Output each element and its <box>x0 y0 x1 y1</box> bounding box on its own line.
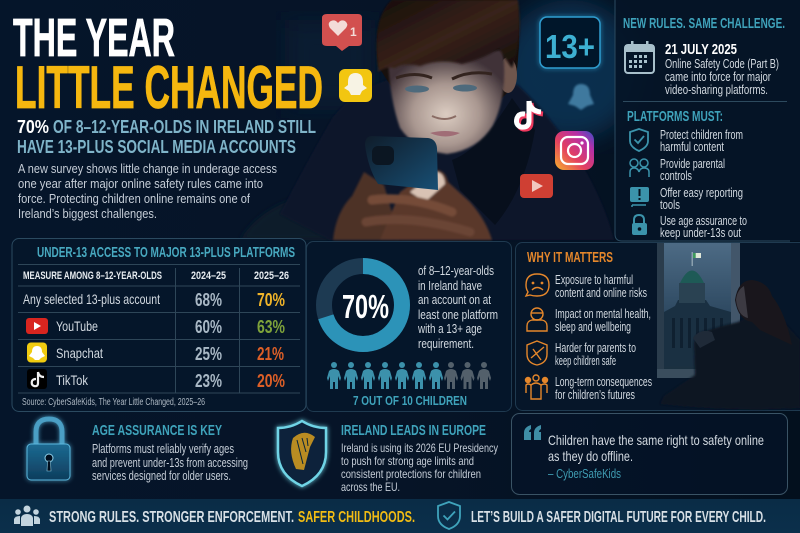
item: long-term: Long-term consequences <box>555 375 652 389</box>
icon: shield check <box>630 129 648 151</box>
icon: like notification: 1 <box>350 25 357 39</box>
item: protect children <box>660 128 743 154</box>
text block: Ireland leads: to push for strong age limits and <box>341 454 474 468</box>
face <box>388 50 504 154</box>
row: youtube: 63% <box>257 317 285 337</box>
icon: broken shield <box>527 341 547 365</box>
panel: access table <box>12 238 306 412</box>
item: mental health: sleep and wellbeing <box>555 320 631 334</box>
quote text: as they do offline. <box>548 448 633 464</box>
icon: parents <box>630 159 649 177</box>
building <box>664 252 731 366</box>
text block: Ireland leads: Ireland is using its 2026 EU Presidency <box>341 441 498 455</box>
item: age assurance: Use age assurance to <box>660 214 747 228</box>
text block: Ireland leads: across the EU. <box>341 480 400 494</box>
item: long-term: for children’s futures <box>555 388 635 402</box>
item: parents <box>555 341 636 368</box>
illustration: digital padlock <box>27 419 70 480</box>
quote mark <box>524 425 541 440</box>
text block: age assurance: services designed for older users. <box>92 469 231 483</box>
row: snapchat: 21% <box>257 344 284 364</box>
statistic description: in Ireland have <box>418 278 482 293</box>
row: snapchat: Snapchat <box>56 345 103 361</box>
quote attribution: – CyberSafeKids <box>548 467 621 481</box>
pictogram caption: 7 OUT OF 10 CHILDREN <box>353 393 467 408</box>
text block: age assurance: AGE ASSURANCE IS KEY <box>92 422 222 439</box>
table source: Source: CyberSafeKids, The Year Little Changed, 2025–26 <box>22 397 205 408</box>
icon: people <box>14 506 40 526</box>
text block: age assurance <box>92 422 248 483</box>
statistic description: with a 13+ age <box>417 321 482 336</box>
row: any account: 68% <box>195 290 222 310</box>
pictogram: 7 of 10 children <box>327 362 491 389</box>
footer banner <box>0 499 800 533</box>
row: any account: Any selected 13-plus account <box>23 291 160 307</box>
icon: report <box>630 187 649 207</box>
rule description: video-sharing platforms. <box>665 83 768 97</box>
girl silhouette <box>660 280 800 409</box>
icon: instagram <box>555 131 594 170</box>
panel: quote <box>512 414 788 494</box>
row: tiktok: 20% <box>257 371 285 391</box>
text block: Ireland leads <box>341 422 498 494</box>
panel: 70 percent statistic <box>306 242 512 412</box>
rule description: came into force for major <box>665 70 771 84</box>
hoodie <box>280 80 614 240</box>
row: snapchat: 25% <box>195 344 222 364</box>
item: parental controls: Provide parental <box>660 157 725 171</box>
icon: snapchat <box>339 69 372 102</box>
item: reporting tools: Offer easy reporting <box>660 186 743 200</box>
illustration: Irish harp shield <box>278 421 326 486</box>
item: protect children: harmful content <box>660 140 724 154</box>
eyes and brows <box>396 73 492 136</box>
statistic description <box>417 263 498 351</box>
table header: 2025–26 <box>254 270 289 282</box>
icon: tiktok <box>516 101 543 129</box>
title <box>13 8 323 121</box>
item: age assurance: keep under-13s out <box>660 226 741 240</box>
row: tiktok: 23% <box>195 371 222 391</box>
hands <box>333 170 492 240</box>
text block: Ireland leads: consistent protections for children <box>341 467 481 481</box>
item: reporting tools: tools <box>660 198 680 212</box>
row: snapchat <box>27 342 284 364</box>
intro text: Ireland’s biggest challenges. <box>18 206 157 221</box>
panel: new rules <box>615 0 800 241</box>
icon: ghost <box>568 84 594 110</box>
item: exposure: content and online risks <box>555 286 647 300</box>
illustration: girl at window <box>657 243 800 409</box>
subtitle: 70% <box>17 117 49 137</box>
intro text: force. Protecting children online remains one of <box>18 191 250 206</box>
icon: youtube <box>520 174 553 198</box>
statistic description: of 8–12-year-olds <box>418 263 494 278</box>
item: parents: Harder for parents to <box>555 341 636 355</box>
row: tiktok: TikTok <box>56 372 89 388</box>
icon: sad face <box>526 274 549 296</box>
intro text: one year after major online safety rules came into <box>18 176 263 191</box>
icon: calendar <box>625 41 654 73</box>
row: youtube: YouTube <box>56 318 98 334</box>
phone <box>365 136 438 190</box>
table header: 2024–25 <box>191 270 226 282</box>
hair front <box>377 0 520 72</box>
donut chart <box>324 266 402 344</box>
item: parents: keep children safe <box>555 354 616 368</box>
text block: Ireland leads: IRELAND LEADS IN EUROPE <box>341 422 486 439</box>
subtitle <box>17 117 316 157</box>
hair back <box>377 0 519 110</box>
icon: 13+ badge: 13+ <box>545 28 595 65</box>
panel: why it matters <box>516 242 800 410</box>
icon: family group <box>526 375 548 399</box>
heading: WHY IT MATTERS <box>527 249 613 266</box>
table header: MEASURE AMONG 8–12-YEAR-OLDS <box>23 270 162 282</box>
item: parental controls: controls <box>660 169 692 183</box>
slogan: STRONG RULES. STRONGER ENFORCEMENT. <box>49 509 294 526</box>
quote text <box>548 432 764 464</box>
text block: age assurance: Platforms must reliably verify ages <box>92 442 234 456</box>
statistic description: least one platform <box>418 307 498 322</box>
icon: 13+ badge <box>540 17 600 68</box>
intro text: A new survey shows little change in underage access <box>18 161 277 176</box>
item: mental health <box>555 307 651 334</box>
platforms must heading: PLATFORMS MUST: <box>627 108 723 125</box>
row: any account <box>23 290 285 310</box>
item: mental health: Impact on mental health, <box>555 307 651 321</box>
table heading: UNDER-13 ACCESS TO MAJOR 13-PLUS PLATFORMS <box>37 244 295 261</box>
title: LITTLE CHANGED <box>15 54 323 121</box>
text block: age assurance: and prevent under-13s from accessing <box>92 456 248 470</box>
slogan: SAFER CHILDHOODS. <box>298 509 415 526</box>
date: 21 JULY 2025 <box>665 41 737 58</box>
item: exposure: Exposure to harmful <box>555 273 633 287</box>
ear <box>499 57 517 93</box>
item: parental controls <box>660 157 725 183</box>
item: exposure <box>555 273 647 300</box>
row: tiktok <box>27 369 285 391</box>
statistic description: requirement. <box>418 336 474 351</box>
item: long-term <box>555 375 652 402</box>
row: youtube <box>26 317 285 337</box>
intro text <box>18 161 277 221</box>
donut chart: 70% <box>342 288 389 325</box>
icon: head and shoulders <box>527 308 547 331</box>
item: reporting tools <box>660 186 743 212</box>
title: THE YEAR <box>13 8 175 68</box>
subtitle: OF 8–12-YEAR-OLDS IN IRELAND STILL <box>53 117 316 137</box>
icon: shield check <box>438 502 460 529</box>
item: age assurance <box>660 214 747 240</box>
statistic description: an account on at <box>418 292 491 307</box>
subtitle: HAVE 13-PLUS SOCIAL MEDIA ACCOUNTS <box>17 137 296 157</box>
icon: like notification <box>322 14 362 51</box>
row: youtube: 60% <box>195 317 222 337</box>
hero photo: boy looking at phone <box>240 0 640 240</box>
row: any account: 70% <box>257 290 285 310</box>
item: protect children: Protect children from <box>660 128 743 142</box>
rule description <box>665 57 779 97</box>
icon: padlock <box>632 215 647 235</box>
